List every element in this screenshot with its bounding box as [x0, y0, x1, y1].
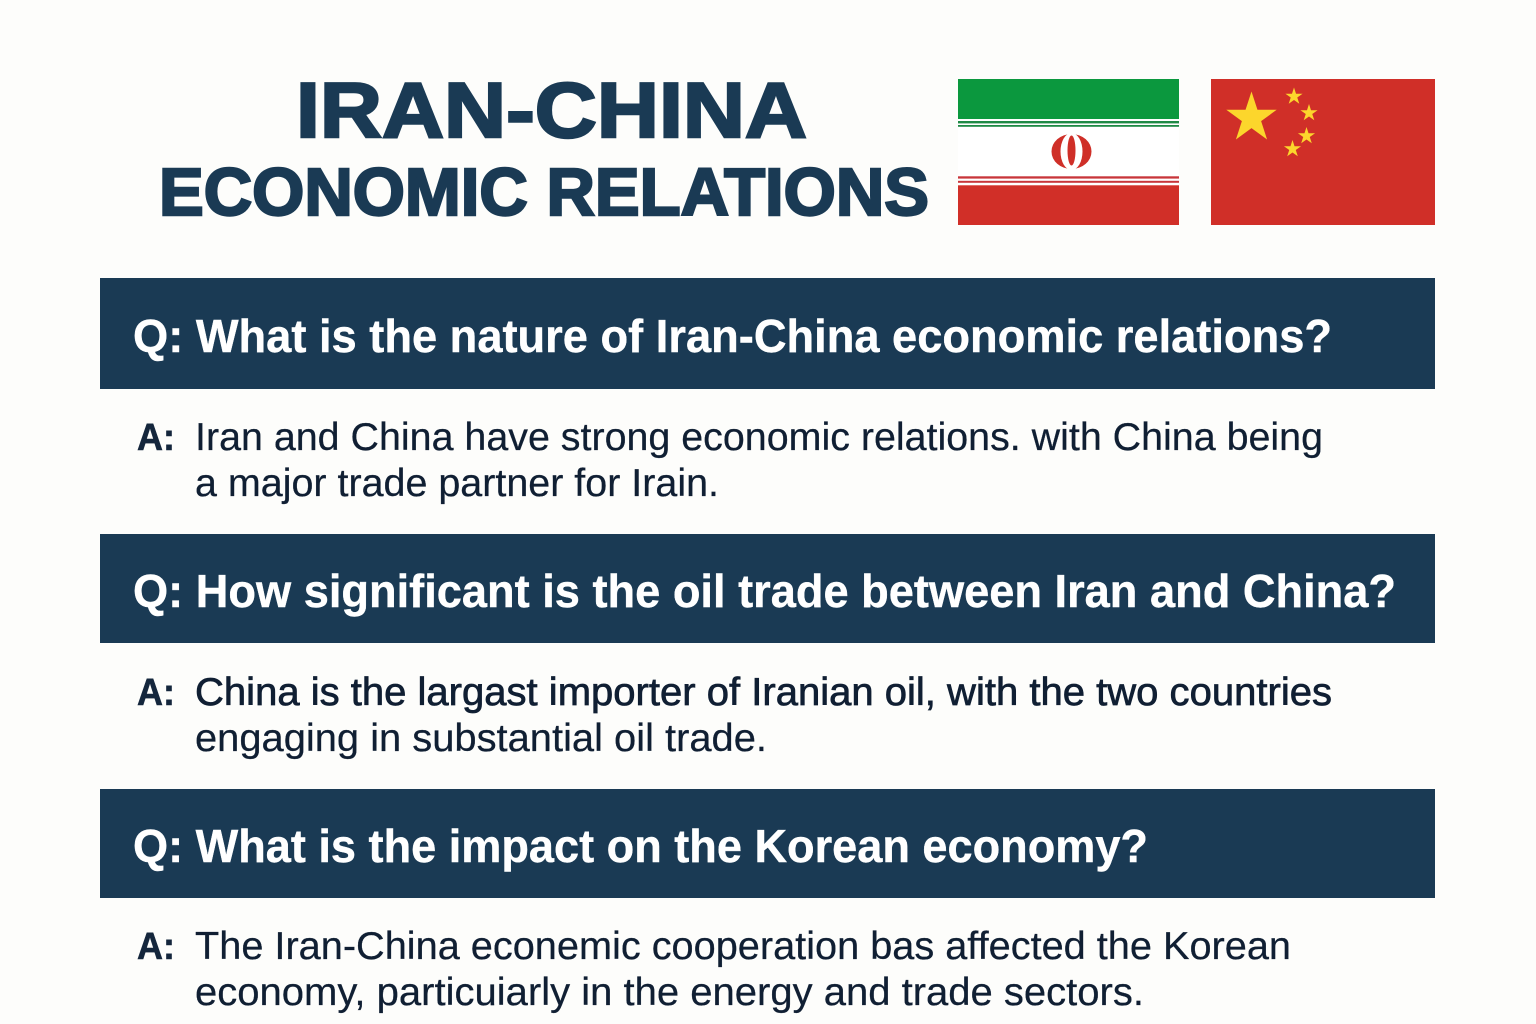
- question 2 banner: [100, 534, 1435, 643]
- answer 1: [137, 416, 1323, 505]
- answer 1: Iran and China have strong economic relations. with China being: [195, 416, 1323, 459]
- icon: Iran flag: [958, 79, 1179, 225]
- answer 1: a major trade partner for Irain.: [195, 462, 719, 505]
- icon: China flag: [1211, 79, 1435, 225]
- answer 2: [137, 671, 1332, 760]
- question 3 banner: [100, 789, 1435, 898]
- answer 2: A:: [137, 672, 175, 714]
- title: [159, 66, 929, 230]
- question 2 banner: Q: How significant is the oil trade between Iran and China?: [133, 565, 1396, 617]
- answer 1: A:: [137, 417, 175, 459]
- question 3 banner: Q: What is the impact on the Korean economy?: [133, 820, 1148, 872]
- answer 3: [137, 925, 1291, 1014]
- answer 2: China is the largast importer of Iranian oil, with the two countries: [195, 671, 1332, 714]
- answer 3: The Iran-China econemic cooperation bas affected the Korean: [195, 925, 1291, 968]
- title: ECONOMIC RELATIONS: [159, 155, 929, 230]
- answer 2: engaging in substantial oil trade.: [195, 717, 767, 760]
- question 1 banner: [100, 278, 1435, 389]
- title: IRAN-CHINA: [296, 66, 807, 154]
- question 1 banner: Q: What is the nature of Iran-China economic relations?: [133, 310, 1332, 362]
- answer 3: A:: [137, 926, 175, 968]
- answer 3: economy, particuiarly in the energy and trade sectors.: [195, 971, 1144, 1014]
